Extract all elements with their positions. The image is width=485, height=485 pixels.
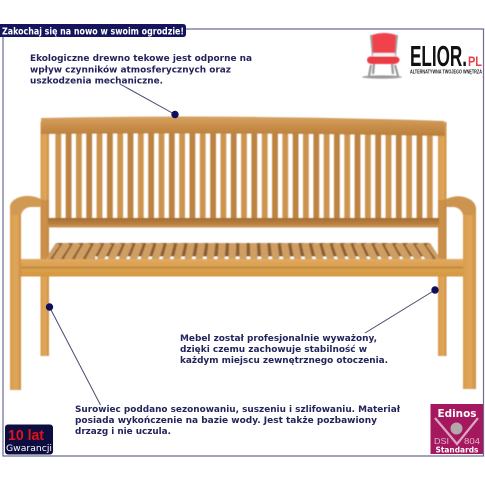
leader line with dot — [120, 84, 179, 118]
callout: balanced furniture — [180, 286, 439, 366]
bench illustration — [10, 117, 476, 390]
right armrest — [446, 196, 476, 215]
callout text: posiada wykończenie na bazie wody. Jest także pozbawiony — [75, 415, 377, 426]
badge: 10 year warranty: 10 lat — [8, 427, 44, 444]
callout text: wpływ czynników atmosferycznych oraz — [30, 64, 231, 76]
badge: Edinos DSI 804 Standards — [430, 404, 483, 454]
badge: Edinos DSI 804 Standards: Standards — [436, 446, 479, 454]
top back rail — [41, 117, 445, 136]
post shading above seat — [40, 200, 446, 260]
callout text: Surowiec poddano sezonowaniu, suszeniu i szlifowaniu. Materiał — [75, 404, 401, 415]
badge: Edinos DSI 804 Standards: 804 — [464, 436, 480, 446]
callout text: dzięki czemu zachowuje stabilność w — [180, 344, 367, 355]
leader line with dot — [46, 303, 100, 405]
left armrest — [10, 196, 41, 215]
callout text: drzazg i nie uczula. — [75, 426, 171, 437]
callout text: Mebel został profesjonalnie wyważony, — [180, 333, 377, 344]
leader line with dot — [365, 286, 439, 333]
callout text: Ekologiczne drewno tekowe jest odporne na — [30, 53, 252, 64]
callout: seasoned material — [46, 303, 401, 437]
bench back slats — [58, 130, 430, 220]
back right leg and post — [438, 122, 446, 356]
badge: 10 year warranty — [5, 424, 53, 454]
logo: Elior.pl — [362, 33, 482, 79]
title banner — [0, 24, 186, 38]
badge: Edinos DSI 804 Standards: Edinos — [438, 407, 477, 420]
back left leg and post — [40, 122, 49, 356]
icon: red chair — [362, 33, 402, 79]
title banner: Zakochaj się na nowo w swoim ogrodzie! — [2, 26, 184, 38]
callout text: uszkodzenia mechaniczne. — [30, 76, 163, 86]
callout: durable teak wood — [30, 53, 252, 118]
front seat rail — [21, 259, 464, 276]
left front leg — [10, 207, 21, 390]
seat slats — [40, 243, 450, 260]
badge: 10 year warranty: Gwarancji — [6, 444, 52, 454]
badge: Edinos DSI 804 Standards: DSI — [434, 436, 449, 446]
right front leg — [463, 207, 476, 389]
callout text: każdym miejscu zewnętrznego otoczenia. — [180, 355, 388, 366]
lower back rail — [48, 218, 439, 228]
